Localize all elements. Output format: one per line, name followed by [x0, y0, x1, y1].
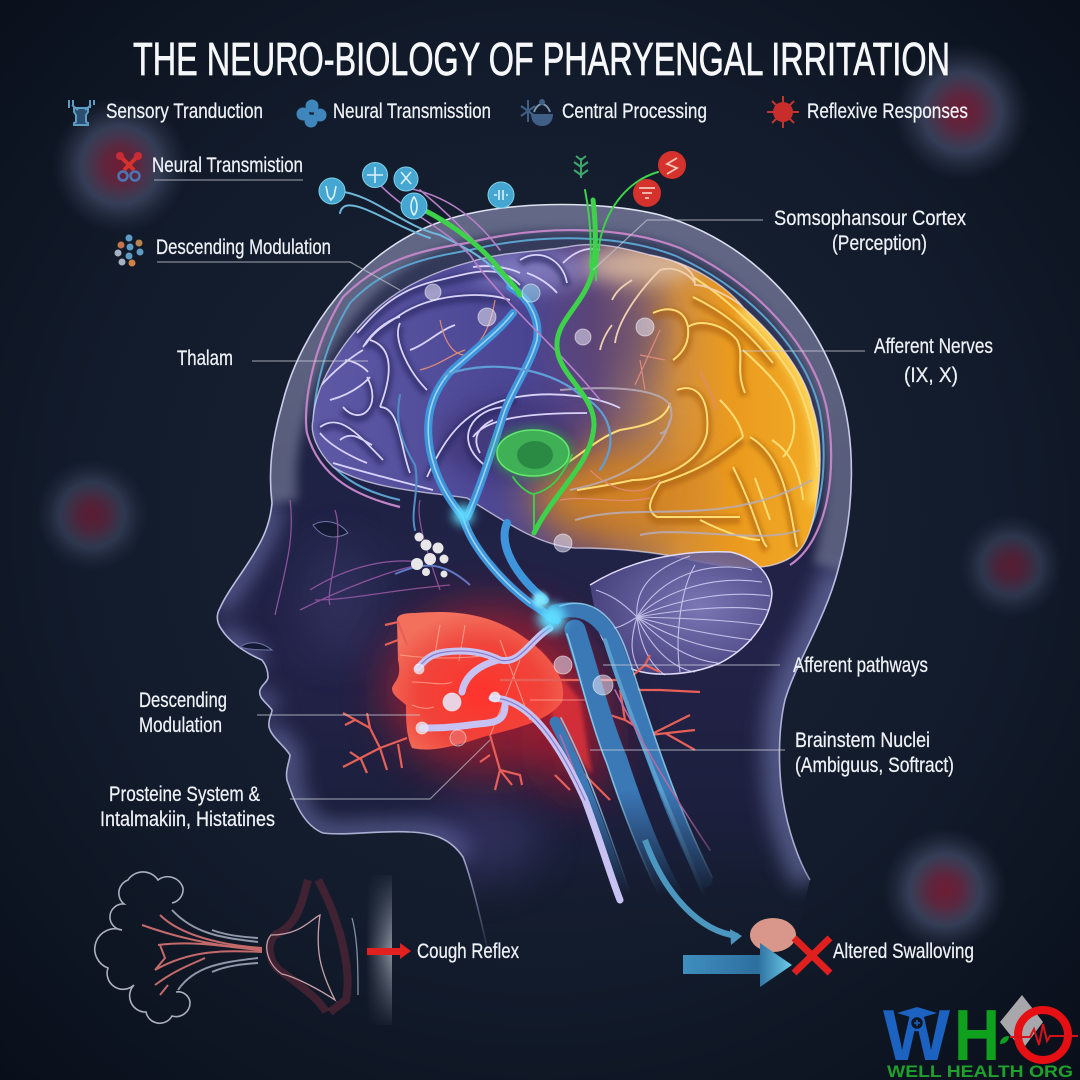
- bolus: [750, 918, 796, 952]
- icon: sensory transduction: [69, 100, 94, 125]
- label: descending modulation top: Descending Modulation: [156, 236, 331, 259]
- translucent neuron nodes: [414, 284, 654, 746]
- head silhouette: [217, 205, 851, 960]
- logo O ring: [1018, 1010, 1068, 1060]
- brain tonal zones: [440, 247, 820, 545]
- logo W: W: [883, 996, 950, 1076]
- red irritated pharynx: [343, 605, 700, 800]
- label: ambiguus softract: (Ambiguus, Softract): [795, 754, 954, 777]
- icon: neural transmission red: [116, 152, 142, 180]
- orange gyri highlights: [567, 277, 817, 547]
- grey nerve arcs in brain: [560, 388, 812, 536]
- label: thalam: Thalam: [177, 347, 233, 370]
- peach upper gyri: [600, 255, 743, 350]
- label: neural transmistion: Neural Transmistion: [152, 154, 303, 177]
- label: somsophansour cortex: Somsophansour Cortex: [774, 207, 966, 230]
- altered swallowing diagram: [683, 918, 974, 987]
- legend label: sensory transduction: Sensory Tranduction: [106, 100, 263, 123]
- logo H: H: [954, 996, 1000, 1076]
- label: descending: Descending: [139, 689, 227, 712]
- legend row: [69, 96, 968, 128]
- background blurred cells: [36, 44, 1063, 952]
- vertical glow bar: [366, 875, 392, 1025]
- skull band nerves: [306, 230, 831, 565]
- legend label: neural transmission: Neural Transmisstion: [333, 100, 491, 123]
- red x: [794, 938, 830, 973]
- label: ix x: (IX, X): [904, 364, 958, 387]
- side labels: [100, 152, 993, 831]
- cough cloud outline: [95, 872, 190, 1023]
- cerebellum: [590, 552, 772, 675]
- logo cap: [897, 1007, 937, 1030]
- logo heartbeat: [1010, 1024, 1078, 1045]
- icon: reflexive responses: [767, 96, 799, 128]
- logo leaves: [1000, 1036, 1009, 1044]
- purple gyri shadow: [320, 258, 567, 480]
- purple gyri highlights: [317, 249, 620, 490]
- brain: [312, 245, 820, 568]
- label: brainstem nuclei: Brainstem Nuclei: [795, 729, 930, 752]
- blue and lilac nerve pathways: [338, 172, 738, 936]
- brainstem tubes: [555, 603, 712, 920]
- label: cough reflex: Cough Reflex: [417, 940, 519, 963]
- small red and orange fibres: [420, 300, 715, 501]
- big blue arrow: [683, 943, 792, 987]
- legend label: central processing: Central Processing: [562, 100, 707, 123]
- label: afferent pathways: Afferent pathways: [793, 654, 928, 677]
- blue receptor icons: [319, 162, 514, 219]
- green nerves: [420, 172, 658, 533]
- icon: central processing: [521, 100, 553, 126]
- white vesicle cluster: [411, 532, 448, 578]
- upper blue nerves: [428, 287, 557, 620]
- top signal icons: [319, 151, 686, 219]
- red branching nerves: [343, 622, 700, 800]
- icon: descending modulation dots: [114, 234, 144, 266]
- label: intalmakiin histatines: Intalmakiin, Histatines: [100, 808, 275, 831]
- green plant icon: [574, 156, 588, 178]
- label: perception: (Perception): [832, 232, 927, 255]
- arrow tip: [730, 929, 742, 945]
- logo gray diamond: [1000, 995, 1043, 1050]
- label: modulation: Modulation: [139, 714, 222, 737]
- icon: neural transmission: [296, 100, 326, 128]
- cough reflex diagram: [95, 872, 519, 1025]
- label: afferent nerves: Afferent Nerves: [874, 335, 993, 358]
- red arrow: [367, 943, 411, 959]
- cough airflow lines: [142, 910, 262, 995]
- orange gyri shadow: [577, 300, 797, 550]
- thalamus green blob: [493, 427, 573, 479]
- logo: well health org: [883, 995, 1078, 1080]
- brain outline: [312, 245, 820, 568]
- label: prosteine system: Prosteine System &: [109, 783, 260, 806]
- lilac tubes into pharynx: [418, 628, 620, 900]
- head inner glow and skull band: [220, 205, 851, 880]
- legend label: reflexive responses: Reflexive Responses: [807, 100, 968, 123]
- throat shape: [267, 880, 358, 1012]
- label: altered swalloving: Altered Swalloving: [833, 940, 974, 963]
- face details: [240, 522, 348, 650]
- red response icons: [633, 151, 686, 207]
- leader lines: [154, 180, 865, 799]
- glowing nerve junctions: [453, 505, 566, 632]
